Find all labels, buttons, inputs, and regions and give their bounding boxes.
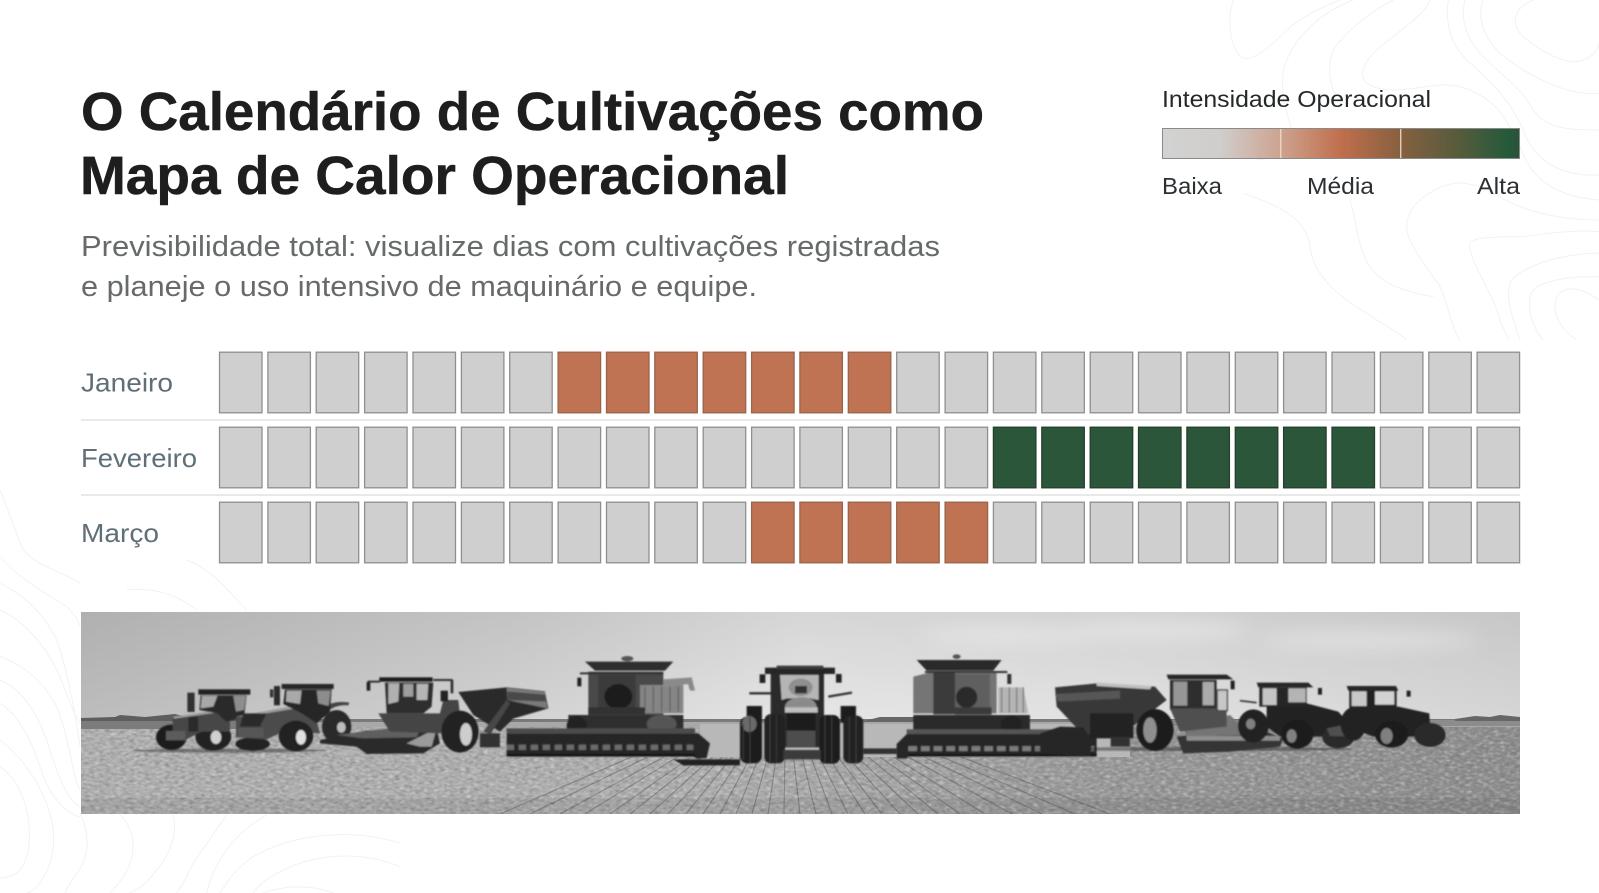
- title: O Calendário de Cultivações como: [81, 82, 984, 142]
- row: Janeiro: [81, 352, 1520, 413]
- medium intensity days: [752, 502, 988, 563]
- legend labels: Baixa: [1162, 173, 1222, 199]
- low intensity days: [220, 502, 1520, 563]
- sky: [81, 612, 1520, 719]
- left combine: [507, 656, 710, 759]
- month label: Março: Março: [81, 518, 159, 548]
- high intensity days: [993, 427, 1374, 488]
- center tractor: [740, 666, 863, 764]
- row: Fevereiro: [81, 427, 1520, 488]
- title: Mapa de Calor Operacional: [80, 146, 789, 206]
- month label: Janeiro: Janeiro: [81, 368, 173, 398]
- crop rows: [500, 757, 1110, 814]
- legend labels: Alta: [1477, 173, 1520, 199]
- title: [80, 82, 984, 206]
- tractor 2: [235, 684, 351, 751]
- row: Março: [81, 502, 1520, 563]
- legend labels: Média: [1307, 173, 1374, 199]
- low intensity days: [220, 352, 1520, 413]
- photo strip: farm machinery in a field: [81, 612, 1520, 814]
- low intensity days: [220, 427, 1520, 488]
- planter tractor with implement: [320, 677, 460, 754]
- tractor 4: [1341, 686, 1446, 748]
- subtitle: [81, 231, 940, 303]
- legend labels: [1162, 173, 1520, 199]
- legend title: Intensidade Operacional: [1162, 86, 1431, 112]
- tractor 3: [1238, 683, 1354, 749]
- subtitle: Previsibilidade total: visualize dias com cultivações registradas: [81, 231, 940, 263]
- field: [81, 727, 1520, 814]
- horizon tree line: [81, 714, 1520, 757]
- legend gradient bar: [1162, 128, 1520, 158]
- heatmap calendar: [81, 352, 1520, 563]
- grain cart: [1040, 682, 1174, 756]
- center group: combines and front tractor: [507, 654, 1097, 765]
- machinery: [133, 654, 1446, 765]
- legend: intensidade operacional: [1162, 86, 1520, 199]
- implement and cab: [1167, 675, 1283, 753]
- right combine: [897, 654, 1097, 759]
- grain cart: [441, 687, 548, 753]
- tractor 1: [156, 689, 250, 751]
- subtitle: e planeje o uso intensivo de maquinário e equipe.: [81, 271, 757, 303]
- left group: tractors, planter and grain cart: [133, 677, 548, 754]
- month label: Fevereiro: Fevereiro: [81, 443, 197, 473]
- medium intensity days: [558, 352, 891, 413]
- right group: grain cart and tractors: [1033, 675, 1446, 756]
